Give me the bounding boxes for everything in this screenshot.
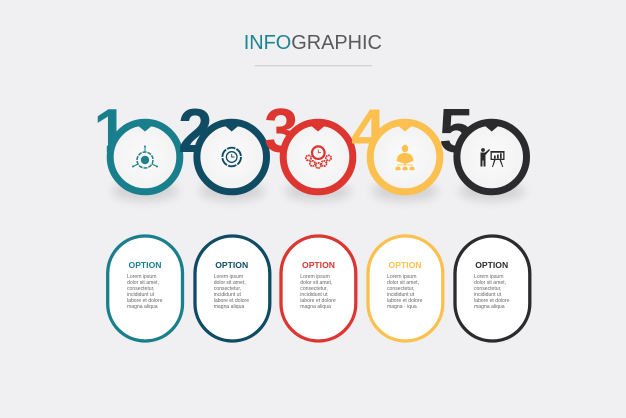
step 1: teal numbered ring — [94, 97, 180, 201]
text block: option 5: incididunt ut — [474, 292, 502, 298]
heading: option 5: OPTION — [475, 260, 508, 270]
heading: option 3: OPTION — [302, 260, 335, 270]
text block: option 1: dolor sit amet, — [127, 280, 159, 286]
step 4: yellow numbered ring — [351, 97, 440, 201]
number 5: 5 — [439, 97, 473, 166]
title — [244, 32, 382, 66]
text block: option 4: consectetur, — [387, 286, 414, 292]
text block: option 2: dolor sit amet, — [214, 280, 246, 286]
icon: presenter with board — [480, 148, 504, 167]
text block: option 5: magna aliqua — [474, 304, 505, 310]
text block: option 4: Lorem ipsum — [387, 274, 416, 280]
number 4: 4 — [351, 97, 386, 166]
icon: clock with gears — [306, 146, 331, 168]
text block: option 5: Lorem ipsum — [474, 274, 503, 280]
text block: option 4: incididunt ut — [387, 292, 415, 298]
text block: option 5: consectetur, — [474, 286, 501, 292]
heading: option 2: OPTION — [215, 260, 248, 270]
text block: option 1: labore et dolore — [127, 298, 163, 304]
icon: manager hierarchy — [396, 145, 414, 170]
icon: clock cycle — [222, 148, 241, 166]
panel: option 3 — [281, 236, 356, 341]
text block: option 5: dolor sit amet, — [474, 280, 506, 286]
text block: option 3: magna aliqua — [300, 304, 331, 310]
text block: option 5: labore et dolore — [474, 298, 510, 304]
text block: option 4: dolor sit amet, — [387, 280, 419, 286]
step 2: navy numbered ring — [178, 97, 266, 201]
panel: option 5 — [455, 236, 530, 341]
text block: option 3: Lorem ipsum — [300, 274, 330, 280]
text block: option 2: consectetur, — [214, 286, 241, 292]
text block: option 4: magna · iqua — [387, 304, 417, 310]
number 2: 2 — [178, 97, 212, 166]
panel: option 2 — [195, 236, 270, 341]
panel: option 4 — [368, 236, 443, 341]
text block: option 3: consectetur, — [300, 286, 328, 292]
text block: option 3: dolor sit amet, — [300, 280, 332, 286]
text block: option 2: magna aliqua — [214, 304, 244, 310]
text block: option 3: labore et dolore — [300, 298, 336, 304]
title: INFOGRAPHIC — [244, 32, 382, 54]
number 1: 1 — [94, 97, 128, 166]
icon: network gear — [132, 146, 158, 168]
text block: option 1: magna aliqua — [127, 304, 158, 310]
text block: option 3: incididunt ut — [300, 292, 328, 298]
step 5: charcoal numbered ring — [439, 97, 526, 201]
text block: option 1: consectetur, — [127, 286, 154, 292]
heading: option 1: OPTION — [129, 260, 161, 270]
panel: option 1 — [108, 236, 182, 341]
text block: option 4: labore et dolore — [387, 298, 423, 304]
heading: option 4: OPTION — [389, 260, 421, 270]
text block: option 2: Lorem ipsum — [214, 274, 243, 280]
text block: option 2: incididunt ut — [214, 292, 241, 298]
text block: option 1: Lorem ipsum — [127, 274, 156, 280]
step 3: red numbered ring — [264, 97, 353, 201]
text block: option 2: labore et dolore — [214, 298, 249, 304]
number 3: 3 — [264, 97, 298, 166]
text block: option 1: incididunt ut — [127, 292, 155, 298]
